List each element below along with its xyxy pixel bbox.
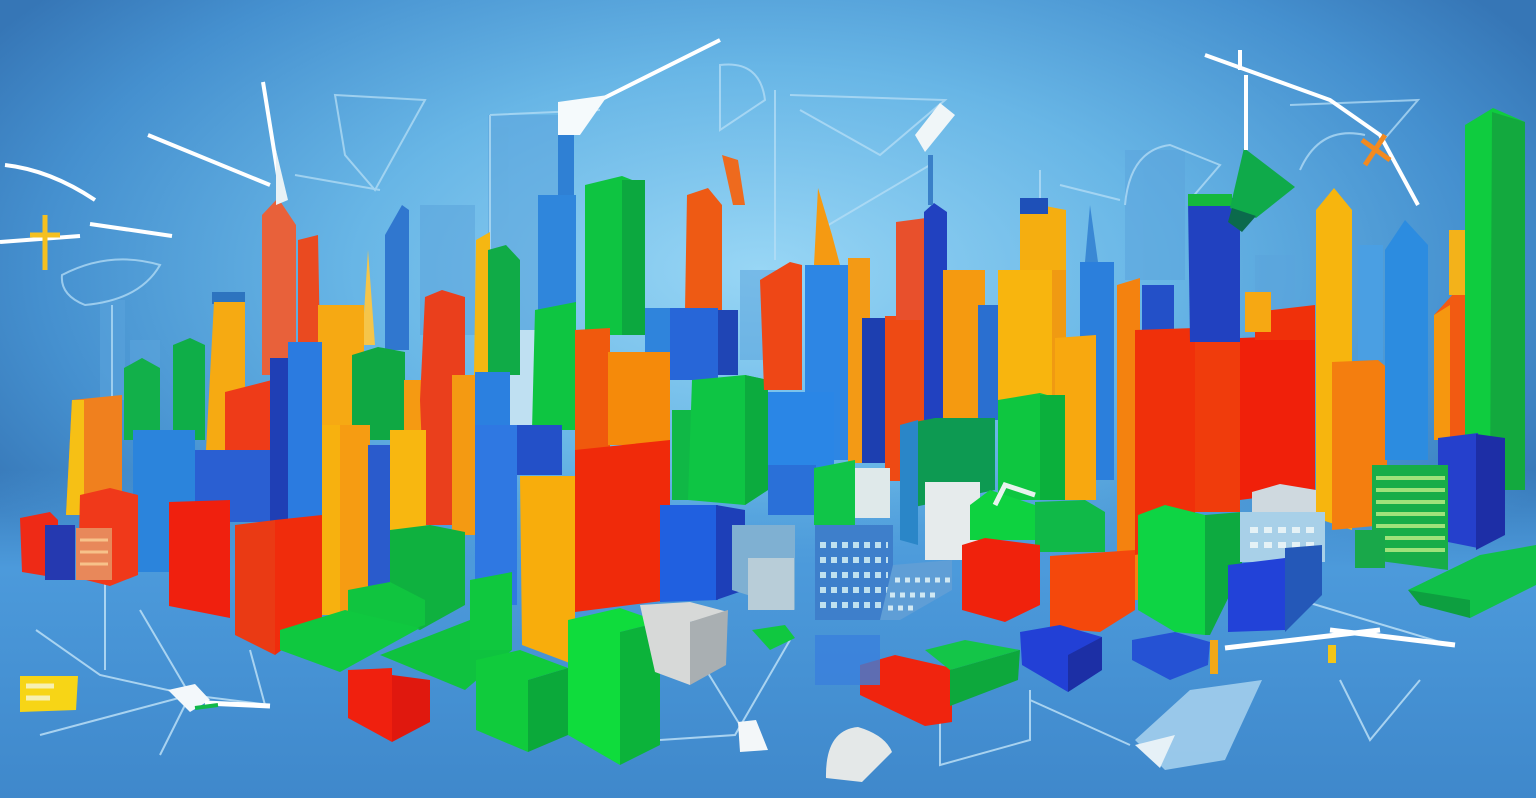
tower: tall red spire [262,198,320,375]
tower: blue centre-left [270,342,322,523]
block: green slab right [1355,530,1536,618]
tower: navy and red [862,155,947,481]
stair: green left [280,525,512,690]
block: red-orange [235,515,322,655]
left faint glass and network lines on the floor [36,570,1450,765]
bright wires and nodes [0,40,1418,270]
tower: orange right [1055,335,1096,500]
icon: yellow star left [30,215,60,270]
tower: green and yellow [474,232,520,375]
block: pale blue bottom [815,635,880,685]
block: blue wide [133,430,273,572]
block: striped green [1372,465,1448,570]
tower: yellow and orange middle [390,375,476,535]
block: green stacked [998,393,1065,500]
block: green teal [900,418,995,545]
tower: red-orange [420,290,465,525]
block: green front [476,650,568,752]
block: blue right [1228,545,1322,632]
tower: orange big side [1117,278,1174,600]
towers: right-centre [862,108,1525,600]
tower: orange left [206,292,245,450]
towers: blue [768,265,849,515]
block: green and white small [814,460,890,525]
block: grey pale and glass [1240,484,1325,562]
block: orange large [575,328,670,452]
tower: pale gap glow [510,330,536,425]
tower: blue slim back [538,135,576,325]
block: red front [348,668,430,742]
tower: orange spike [814,188,870,463]
tower: orange [685,188,722,310]
block: small red left [20,512,75,580]
tower: yellow tall [998,198,1066,400]
block: green large right [1138,505,1242,635]
block: white [925,482,980,560]
towers: green left pair [124,338,205,440]
icon: white shape bottom centre [738,720,768,752]
tower: orange [943,270,1000,420]
towers: centre [474,135,870,665]
small green chip [752,625,795,650]
tower: orange long [322,425,390,615]
block: green cluster right-centre [970,485,1105,552]
block: orange-red [1050,550,1135,632]
tower: orange with yellow edge [66,395,122,515]
tower: blue right [1080,205,1114,480]
block: red wall [1135,292,1315,555]
block: red large [575,440,670,612]
tower: blue mid [475,372,510,432]
tower: green tall [585,176,645,335]
block: navy far right [1438,433,1505,550]
icon: orange cross right [1362,135,1390,165]
tower: small orange [404,380,424,435]
block: navy bottom [1020,625,1210,692]
tower: green block [352,347,405,440]
icon: white spire [276,150,288,205]
tower: orange-red [760,262,802,390]
block: red left [169,500,230,618]
icon: white dome [826,727,892,782]
tower: green lower [532,302,576,430]
tower: blue large [475,425,562,605]
wires: white strokes top [0,40,1418,242]
tower: tall green right [1465,108,1525,490]
tower: blue spire [385,205,409,350]
icon: white tag [915,103,955,152]
tower: navy [1188,194,1240,342]
tower: yellow right [1316,188,1390,530]
block: red centre-right [962,538,1040,622]
block: blue lower [660,505,745,602]
block: blue [645,308,738,380]
tower: orange far right [1434,230,1470,440]
block: grey cube [640,602,728,685]
faint wireframe network [62,64,1418,400]
tower: orange tall behind [318,305,364,435]
block: mosaic pale [815,525,952,620]
block: orange-red striped left [76,488,138,586]
icon: white blob top centre [558,95,608,135]
icon: white node left [168,684,270,712]
block: green front large [568,608,660,765]
icon: yellow card [20,676,78,712]
glass floor reflection right [1135,630,1455,770]
block: green [672,375,768,505]
block: red-green bottom [860,640,1020,726]
tower: pale yellow spike [362,250,375,345]
tower: blue far right [1358,220,1428,460]
faint distant towers [100,115,1295,400]
icon: orange pointer [722,155,745,205]
arrow: green pointer [1228,148,1295,232]
block: pale blue-grey [732,525,795,610]
foreground blocks [20,460,1536,765]
tower: yellow front [520,476,575,665]
tower: red small [225,380,272,455]
towers: back row left [66,198,476,615]
